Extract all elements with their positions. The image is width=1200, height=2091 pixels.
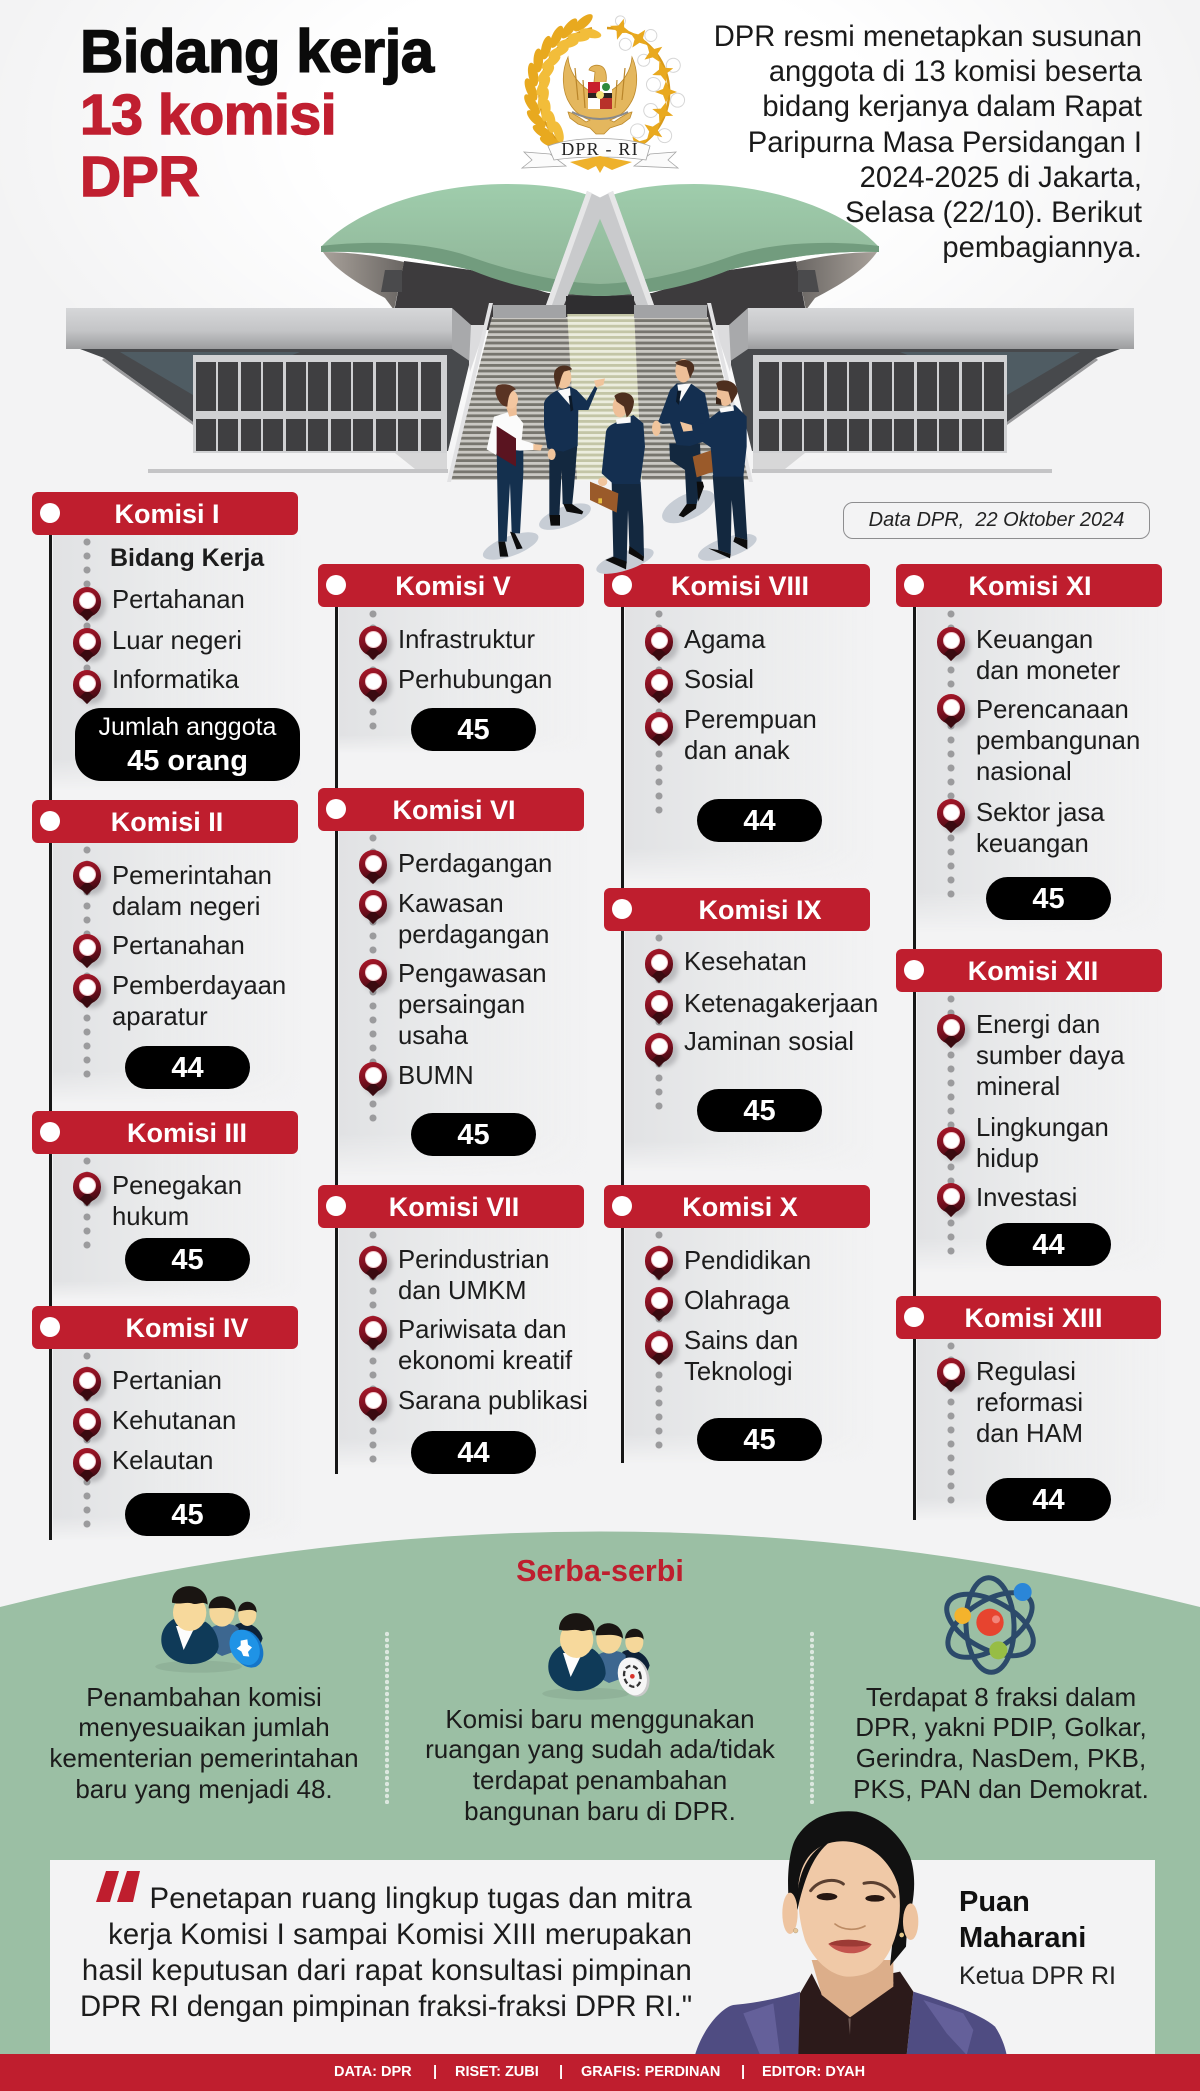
panel: Komisi XII: mineral — [976, 1072, 1060, 1100]
speaker name: Maharani — [959, 1922, 1086, 1954]
footer credits: DATA: DPR — [334, 2064, 412, 2080]
panel: Komisi X: Pendidikan — [684, 1246, 811, 1274]
footer credits: | — [433, 2064, 437, 2080]
subheading: Bidang Kerja — [110, 544, 264, 572]
header: Komisi XII: Komisi XII — [968, 956, 1098, 986]
header: Komisi IV: Komisi IV — [125, 1313, 249, 1343]
figure: man seen from behind — [590, 393, 645, 569]
header: Komisi VI — [318, 788, 584, 831]
member count — [411, 708, 536, 751]
header: Komisi XI: Komisi XI — [968, 571, 1092, 601]
figure: woman — [487, 384, 543, 557]
speaker name: Puan — [959, 1886, 1030, 1918]
intro text: Selasa (22/10). Berikut — [845, 197, 1142, 229]
panel: Komisi II — [32, 800, 298, 1111]
hair — [788, 1811, 914, 1966]
icon: people with target — [542, 1613, 650, 1700]
icon: DPR RI emblem — [521, 14, 685, 173]
icon: garuda — [563, 57, 637, 134]
icon: ribbon: DPR - RI — [561, 139, 639, 159]
panel: Komisi XI: Keuangan — [976, 626, 1093, 654]
text: 8 fraksi: PKS, PAN dan Demokrat. — [853, 1774, 1149, 1804]
quote text: Penetapan ruang lingkup tugas dan mitra — [150, 1882, 692, 1915]
title — [80, 18, 436, 209]
panel: Komisi X: Sains dan — [684, 1326, 798, 1354]
member count — [697, 799, 822, 842]
member count: 45 — [457, 1119, 490, 1151]
footer credits: EDITOR: DYAH — [762, 2064, 865, 2080]
header: Komisi III: Komisi III — [127, 1118, 247, 1148]
panel: Komisi VIII: Perempuan — [684, 706, 817, 734]
panel: Komisi VIII: Sosial — [684, 666, 754, 694]
header: Komisi V: Komisi V — [395, 571, 511, 601]
panel: Komisi I — [32, 492, 300, 800]
quote panel — [50, 1860, 1155, 2054]
panel: Komisi VIII: Agama — [684, 626, 765, 654]
member count — [125, 1493, 250, 1536]
panel: Komisi V: Perhubungan — [398, 666, 552, 694]
panel: Komisi XIII: reformasi — [976, 1388, 1083, 1416]
panel: Komisi IX — [604, 888, 878, 1185]
text: ruangan komisi baru — [425, 1704, 775, 1826]
text: 8 fraksi — [853, 1682, 1149, 1804]
panel: Komisi IV — [32, 1306, 298, 1540]
member count: 44 — [1032, 1484, 1065, 1516]
text: komisi dan kementerian — [49, 1682, 359, 1804]
footer credits: | — [741, 2064, 745, 2080]
text: 8 fraksi: Gerindra, NasDem, PKB, — [856, 1743, 1146, 1773]
panel: Komisi XII: Energi dan — [976, 1010, 1100, 1038]
panel: Komisi II: aparatur — [112, 1002, 208, 1030]
panel: Komisi IX: Ketenagakerjaan — [684, 990, 878, 1018]
figure: man with raised arm — [544, 366, 605, 526]
quote text — [80, 1882, 692, 2023]
panel: Komisi VIII — [604, 564, 870, 888]
panel: Komisi XI — [896, 564, 1162, 949]
panel: Komisi XI: nasional — [976, 758, 1072, 786]
panel: Komisi X — [604, 1185, 870, 1463]
member count — [986, 1223, 1111, 1266]
header: Komisi VII — [318, 1185, 584, 1228]
intro text — [714, 21, 1142, 264]
member count — [986, 877, 1111, 920]
member count — [697, 1089, 822, 1132]
stairs — [450, 317, 750, 480]
header: Komisi VIII — [604, 564, 870, 607]
cotton wreath — [607, 15, 685, 161]
title: DPR — [80, 145, 199, 209]
jacket — [695, 1992, 800, 2055]
panel: Komisi I: Informatika — [112, 666, 239, 694]
member count: 45 — [743, 1095, 776, 1127]
header: Komisi II — [32, 800, 298, 843]
panel: Komisi VII: dan UMKM — [398, 1276, 526, 1304]
member count — [986, 1478, 1111, 1521]
panel: Komisi X: Olahraga — [684, 1286, 790, 1314]
panel: Komisi I: Luar negeri — [112, 626, 242, 654]
panel: Komisi II: Pemerintahan — [112, 862, 272, 890]
member count — [125, 1238, 250, 1281]
figure: man with briefcase — [680, 380, 747, 558]
member count — [125, 1046, 250, 1089]
panel: Komisi II: dalam negeri — [112, 892, 261, 920]
text: ruangan komisi baru: ruangan yang sudah ada/tidak — [425, 1734, 775, 1764]
member count — [697, 1418, 822, 1461]
panel: Komisi VI — [318, 788, 584, 1185]
intro text: anggota di 13 komisi beserta — [769, 56, 1142, 88]
header: Komisi XIII — [896, 1296, 1161, 1339]
icon: ribbon — [522, 138, 678, 173]
panel: Komisi II: Pertanahan — [112, 932, 245, 960]
footer credits: RISET: ZUBI — [455, 2064, 539, 2080]
panel: Komisi XI: dan moneter — [976, 656, 1120, 684]
portrait: Puan Maharani — [695, 1811, 1006, 2054]
background glow — [0, 0, 1200, 520]
member count: 45 — [457, 714, 490, 746]
wheat wreath — [521, 11, 602, 151]
panel: Komisi VI: perdagangan — [398, 920, 549, 948]
intro text: DPR resmi menetapkan susunan — [714, 21, 1142, 53]
panel: Komisi XII: sumber daya — [976, 1042, 1124, 1070]
text: ruangan komisi baru: terdapat penambahan — [473, 1765, 727, 1795]
panel: Komisi I: Pertahanan — [112, 586, 245, 614]
icon: people with shield — [156, 1586, 264, 1672]
header: Komisi V — [318, 564, 584, 607]
header: Komisi X: Komisi X — [682, 1192, 798, 1222]
panel: Komisi VI: usaha — [398, 1022, 468, 1050]
panel: Komisi VI: BUMN — [398, 1062, 474, 1090]
member count: 45 — [171, 1244, 204, 1276]
panel: Komisi X: Teknologi — [684, 1358, 793, 1386]
illustration: DPR building — [66, 184, 1134, 482]
panel: Komisi XIII — [896, 1296, 1161, 1521]
member count — [411, 1113, 536, 1156]
panel: Komisi VII: Perindustrian — [398, 1246, 549, 1274]
panel: Komisi III: hukum — [112, 1202, 189, 1230]
member count: 44 — [171, 1052, 204, 1084]
quote text: hasil keputusan dari rapat konsultasi pimpinan — [82, 1954, 692, 1987]
header: Komisi IX — [604, 888, 870, 931]
member count: 45 — [171, 1499, 204, 1531]
member count — [411, 1431, 536, 1474]
footer credits — [0, 2054, 1200, 2091]
header: Komisi II: Komisi II — [111, 807, 223, 837]
quote text: DPR RI dengan pimpinan fraksi-fraksi DPR RI." — [80, 1990, 692, 2023]
member count — [75, 708, 300, 781]
header: Komisi XIII: Komisi XIII — [964, 1303, 1103, 1333]
panel: Komisi II: Pemberdayaan — [112, 972, 286, 1000]
title: 13 komisi — [80, 83, 336, 147]
panel: Komisi VII: Sarana publikasi — [398, 1386, 588, 1414]
member count: 44 — [743, 805, 776, 837]
member count: Jumlah anggota — [99, 713, 276, 741]
header: Komisi I — [32, 492, 298, 535]
panel: Komisi IX: Jaminan sosial — [684, 1028, 854, 1056]
panel: Komisi XIII: Regulasi — [976, 1358, 1076, 1386]
icon: quote mark — [96, 1871, 140, 1902]
footer credits: GRAFIS: PERDINAN — [581, 2064, 720, 2080]
member count: 44 — [457, 1437, 490, 1469]
divider left — [385, 1631, 389, 1804]
panel: Komisi XI: pembangunan — [976, 726, 1140, 754]
ears — [782, 1893, 798, 1934]
panel: Komisi IV: Kehutanan — [112, 1406, 236, 1434]
text: 8 fraksi: Terdapat 8 fraksi dalam — [866, 1682, 1136, 1712]
illustration: five delegates — [482, 359, 757, 574]
header: Komisi XI — [896, 564, 1162, 607]
footer credits: | — [559, 2064, 563, 2080]
header: Komisi XII — [896, 949, 1162, 992]
panel: Komisi XII — [896, 949, 1162, 1296]
panel: Komisi XIII: dan HAM — [976, 1420, 1083, 1448]
panel: Komisi VIII: dan anak — [684, 736, 790, 764]
text: komisi dan kementerian: Penambahan komisi — [86, 1682, 322, 1712]
panel: Komisi VII: ekonomi kreatif — [398, 1346, 572, 1374]
header: Komisi III — [32, 1111, 298, 1154]
title: Bidang kerja — [80, 18, 434, 85]
icon: atom — [944, 1575, 1036, 1675]
text: ruangan komisi baru: bangunan baru di DPR. — [464, 1796, 736, 1826]
data date label: Data DPR, 22 Oktober 2024 — [869, 509, 1124, 531]
header: Komisi VIII: Komisi VIII — [671, 571, 809, 601]
speaker name — [959, 1886, 1086, 1954]
header: Komisi VII: Komisi VII — [389, 1192, 519, 1222]
figure: man turned left — [652, 359, 714, 517]
intro text: 2024-2025 di Jakarta, — [860, 162, 1142, 194]
header: Komisi IV — [32, 1306, 298, 1349]
quote text: kerja Komisi I sampai Komisi XIII merupakan — [108, 1918, 692, 1951]
heading: Serba-serbi: Serba-serbi — [516, 1554, 684, 1588]
panel: Komisi XII: Lingkungan — [976, 1114, 1109, 1142]
panel: Komisi XI: Perencanaan — [976, 696, 1129, 724]
data date label — [843, 502, 1150, 539]
panel: Komisi VI: Kawasan — [398, 890, 504, 918]
panel: Komisi IV: Pertanian — [112, 1366, 222, 1394]
text: komisi dan kementerian: kementerian pemerintahan — [49, 1743, 359, 1773]
face — [798, 1841, 900, 1977]
header: Komisi X — [604, 1185, 870, 1228]
header: Komisi I: Komisi I — [114, 499, 220, 529]
panel: Komisi VI: Pengawasan — [398, 960, 547, 988]
panel: Komisi IX: Kesehatan — [684, 948, 807, 976]
panel: Komisi VII: Pariwisata dan — [398, 1316, 566, 1344]
neck — [812, 1960, 893, 2017]
panel: Komisi III — [32, 1111, 298, 1306]
text: ruangan komisi baru: Komisi baru menggunakan — [445, 1704, 755, 1734]
panel: Komisi XI: Sektor jasa — [976, 798, 1105, 826]
panel: Komisi XII: hidup — [976, 1144, 1039, 1172]
text: komisi dan kementerian: baru yang menjadi 48. — [75, 1774, 333, 1804]
shadows — [480, 483, 760, 579]
header: Komisi IX: Komisi IX — [698, 895, 822, 925]
panel: Komisi III: Penegakan — [112, 1172, 242, 1200]
panel: Komisi VI: Perdagangan — [398, 850, 552, 878]
panel: Komisi V — [318, 564, 584, 788]
speaker role: Ketua DPR RI — [959, 1962, 1116, 1990]
member count: 45 — [743, 1424, 776, 1456]
text: 8 fraksi: DPR, yakni PDIP, Golkar, — [855, 1712, 1147, 1742]
divider right — [810, 1631, 814, 1804]
panel: Komisi XII: Investasi — [976, 1184, 1077, 1212]
member count: 44 — [1032, 1229, 1065, 1261]
panel: Komisi V: Infrastruktur — [398, 626, 535, 654]
header: Komisi VI: Komisi VI — [392, 795, 516, 825]
green section background — [0, 1532, 1200, 2054]
panel: Komisi XI: keuangan — [976, 830, 1089, 858]
intro text: Paripurna Masa Persidangan I — [748, 127, 1142, 159]
panel: Komisi VII — [318, 1185, 588, 1474]
intro text: pembagiannya. — [942, 232, 1142, 264]
panel: Komisi VI: persaingan — [398, 990, 525, 1018]
member count: 45 — [1032, 883, 1065, 915]
intro text: bidang kerjanya dalam Rapat — [762, 91, 1142, 123]
member count: 45 orang — [127, 745, 248, 777]
text: komisi dan kementerian: menyesuaikan jumlah — [78, 1712, 330, 1742]
panel: Komisi IV: Kelautan — [112, 1446, 213, 1474]
